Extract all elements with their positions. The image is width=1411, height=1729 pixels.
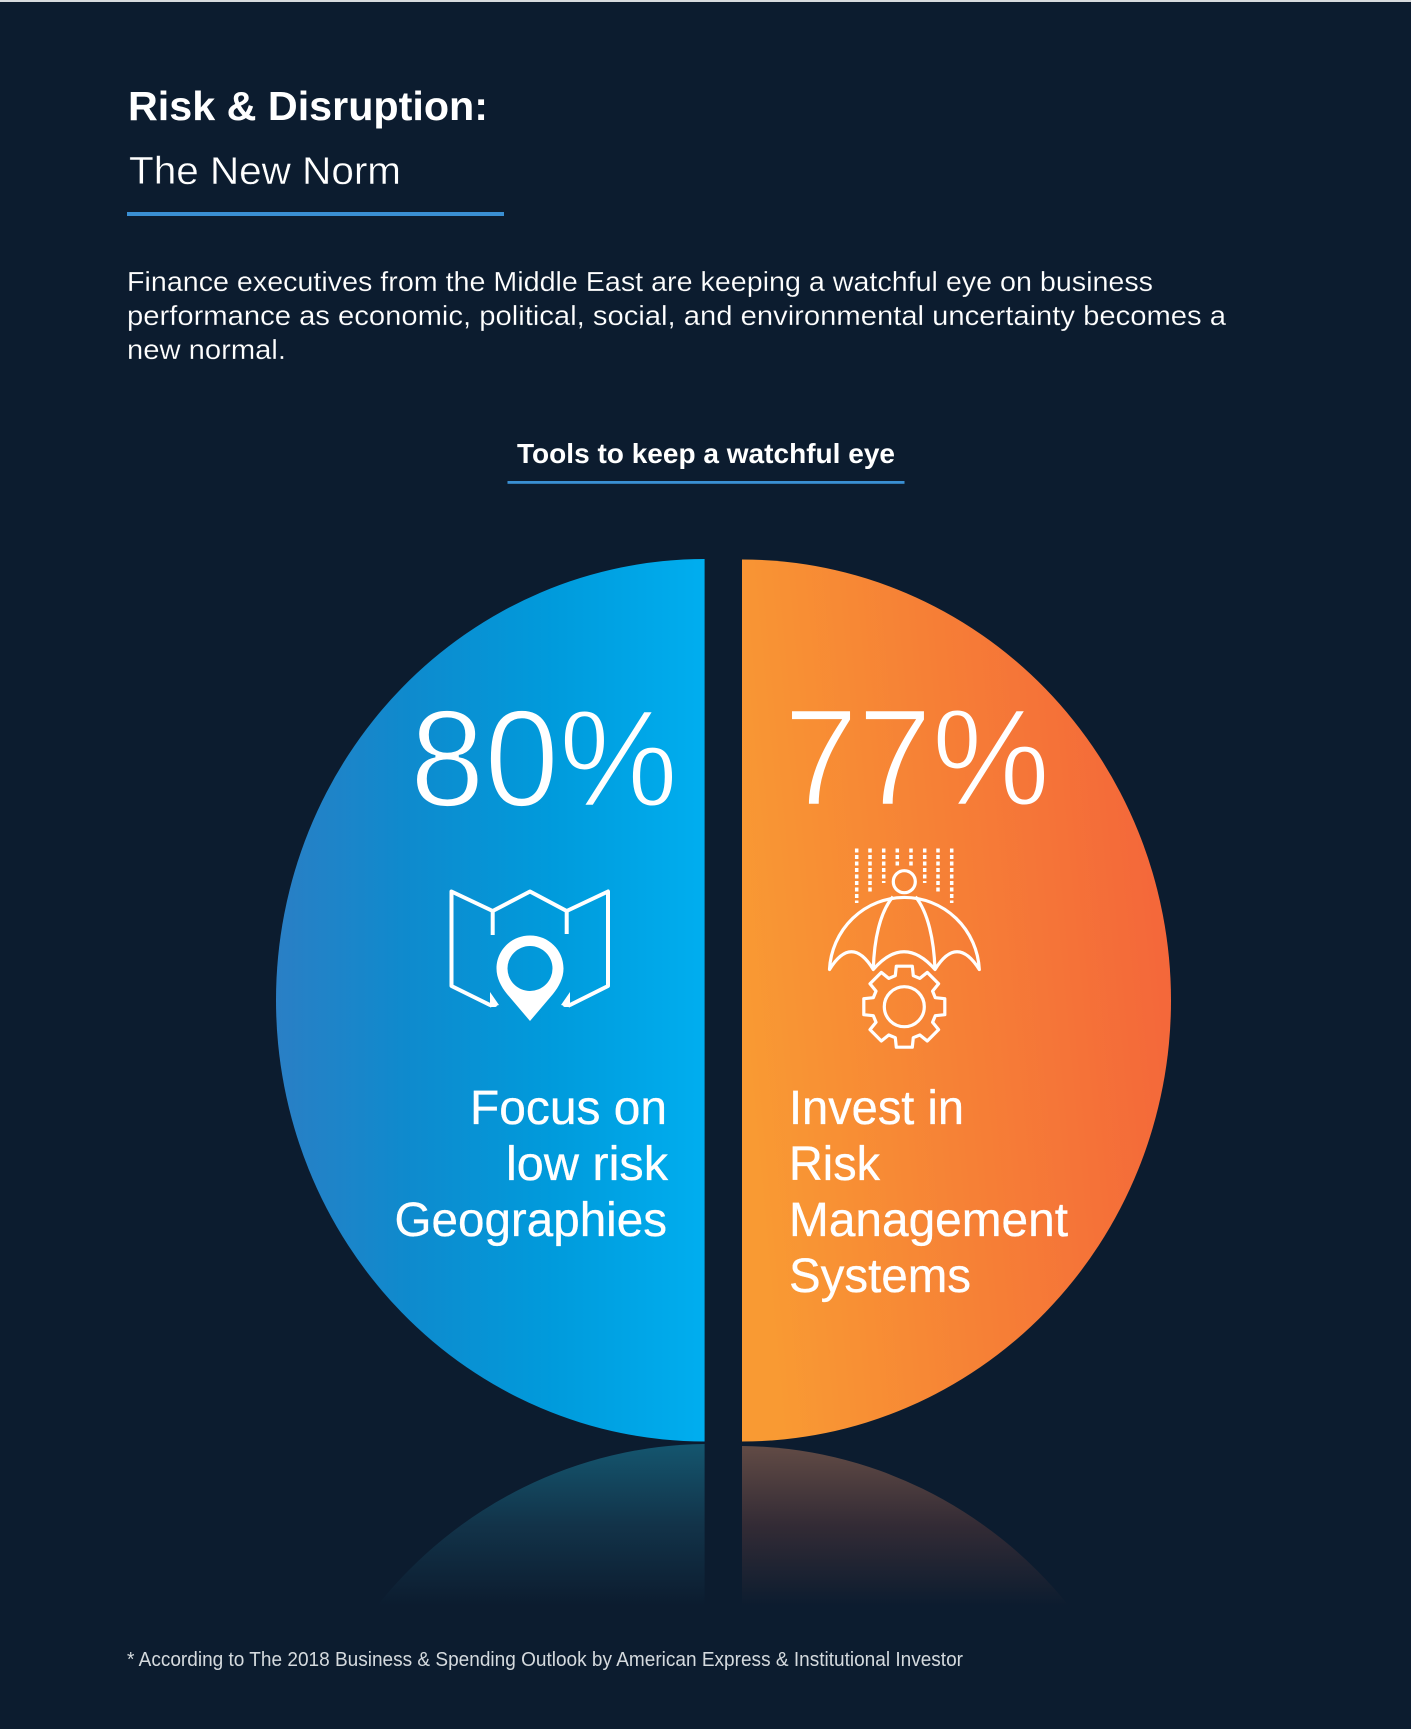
icon: umbrella, rain and gear [830,848,979,1047]
reflection: orange half circle [742,1446,1069,1606]
panel: orange half circle, invest in risk management systems [742,560,1171,1442]
panel: blue half circle, focus on low risk geographies [276,559,705,1442]
label: focus on low risk geographies: low risk [506,1138,669,1191]
intro paragraph: Finance executives from the Middle East are keeping a watchful eye on business [127,266,1153,297]
section heading: Tools to keep a watchful eye [517,438,895,469]
intro paragraph [127,266,1226,365]
label: invest in risk management systems: Invest in [789,1082,964,1135]
icon: folded map with location pin [452,892,608,1021]
title underline [127,212,504,216]
footnote: * According to The 2018 Business & Spending Outlook by American Express & Institutional Investor [127,1649,963,1671]
intro paragraph: new normal. [127,334,286,365]
title: Risk & Disruption: [128,83,488,129]
intro paragraph: performance as economic, political, social, and environmental uncertainty becomes a [127,300,1226,331]
label: focus on low risk geographies: Geographies [394,1194,667,1247]
reflection: blue half circle [377,1444,705,1606]
label: focus on low risk geographies [394,1082,669,1247]
stat: 80%: 80% [410,682,678,836]
label: invest in risk management systems [789,1082,1068,1303]
label: invest in risk management systems: Management [789,1194,1068,1247]
label: invest in risk management systems: Systems [789,1250,971,1303]
label: invest in risk management systems: Risk [789,1138,881,1191]
subtitle: The New Norm [129,150,401,193]
label: focus on low risk geographies: Focus on [470,1082,667,1135]
stat: 77%: 77% [784,681,1050,835]
